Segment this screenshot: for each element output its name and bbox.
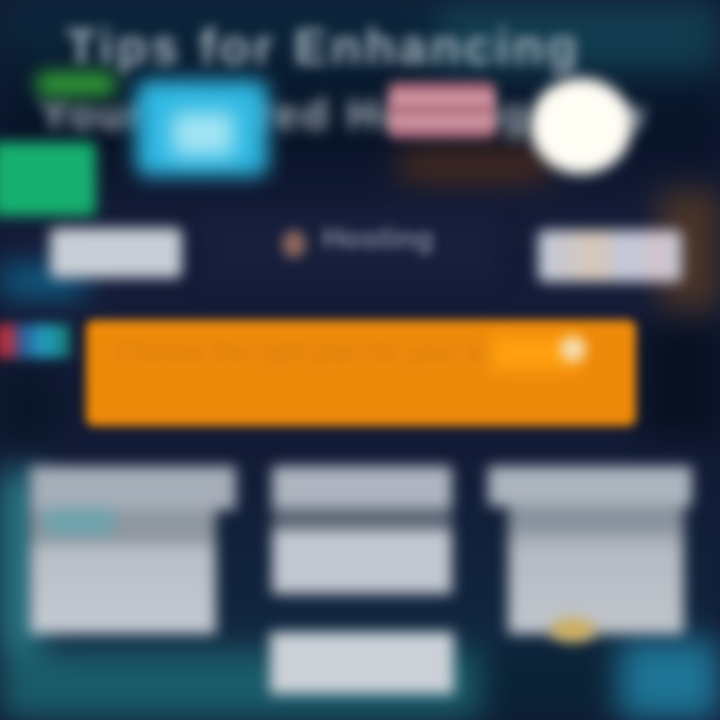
column right body xyxy=(508,506,684,634)
column right heading xyxy=(488,466,692,506)
icon: green leaf xyxy=(36,72,116,96)
column left body xyxy=(30,510,216,634)
icon: centre logo mark xyxy=(282,230,306,258)
icon: callout spark xyxy=(560,336,586,362)
icon: gold glow xyxy=(550,618,596,642)
panel: column right xyxy=(478,456,702,645)
icon: blue box highlight xyxy=(172,112,234,156)
panel: column centre lower xyxy=(270,632,454,694)
icon: red badge xyxy=(388,82,496,138)
panel: column left xyxy=(20,456,246,645)
icon: white circle xyxy=(530,78,632,174)
panel: green block xyxy=(0,142,96,216)
icon: blue box xyxy=(136,80,268,176)
column left heading xyxy=(30,466,236,510)
icon: colored dots xyxy=(0,324,70,358)
panel: left logo xyxy=(50,228,182,278)
title: Tips for Enhancing xyxy=(66,19,581,75)
column centre rule xyxy=(272,508,452,530)
callout text: Choose the right plan for your site xyxy=(116,336,506,366)
panel: right logo xyxy=(538,230,682,282)
subtitle line: Your Shared Hosting Now xyxy=(40,90,648,139)
text: centre logo: Hosting xyxy=(322,222,434,255)
column centre heading xyxy=(272,466,452,508)
icon: callout highlight xyxy=(490,336,580,370)
panel: column centre xyxy=(261,456,463,605)
panel: centre logo xyxy=(205,212,495,284)
column left accent xyxy=(44,508,114,536)
column centre body xyxy=(272,530,452,594)
panel: orange callout xyxy=(86,320,636,426)
